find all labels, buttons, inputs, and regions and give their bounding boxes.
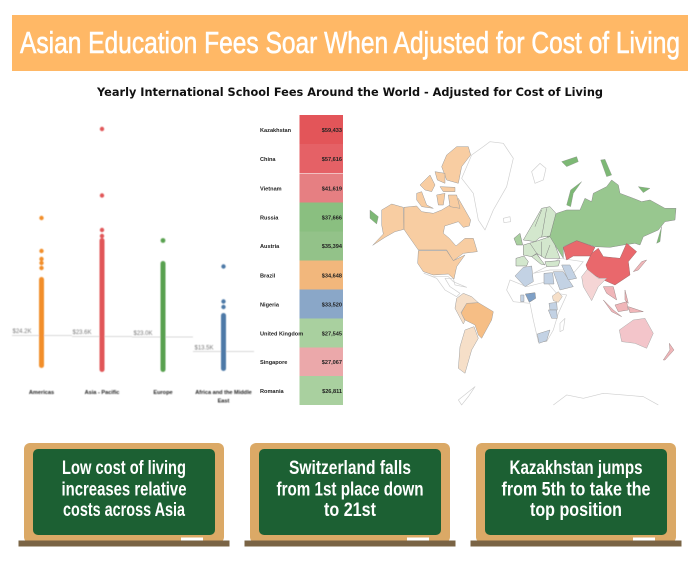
region axis labels: Africa and the Middle [195, 390, 252, 396]
table: top ten countries by fee: $34,648 [322, 274, 342, 280]
chalkboard: low cost of living: Low cost of living [62, 458, 186, 479]
region axis labels: Asia - Pacific [85, 390, 119, 396]
chalkboard: low cost of living: costs across Asia [63, 500, 185, 521]
map: unshaded outlines [424, 142, 658, 405]
chalkboard: Switzerland falls: to 21st [324, 500, 377, 521]
chalkboard: Kazakhstan jumps: Kazakhstan jumps [510, 458, 642, 479]
map: Ethiopia [552, 292, 562, 302]
map: United Kingdom [514, 233, 523, 245]
reference value labels: $23.0K [134, 331, 153, 337]
chart: fee distribution strip plot by region [12, 127, 254, 405]
table: top ten countries by fee: $37,666 [322, 216, 342, 222]
table: top ten countries by fee: $57,616 [322, 157, 342, 163]
table: top ten countries by fee: $27,545 [322, 332, 342, 338]
region axis labels: East [218, 398, 230, 404]
table: top ten countries by fee: $41,619 [322, 186, 342, 192]
table: top ten countries by fee: $33,520 [322, 302, 342, 308]
table: top ten countries by fee: $26,811 [322, 389, 342, 395]
subtitle: Yearly International School Fees Around the World - Adjusted for Cost of Living [96, 85, 603, 99]
table: top ten countries by fee: $59,433 [322, 128, 342, 134]
chalkboard: Switzerland falls: Switzerland falls [289, 458, 411, 479]
map: Nigeria [525, 293, 536, 302]
world map [370, 142, 676, 405]
map: India [582, 269, 607, 301]
map: Arctic green islands [370, 157, 662, 243]
region axis labels [29, 390, 252, 404]
title banner [12, 15, 688, 71]
reference value labels: $24.2K [12, 329, 32, 335]
chalkboard: Kazakhstan jumps: from 5th to take the [502, 480, 650, 500]
chalkboard: Kazakhstan jumps [470, 443, 682, 546]
map: Kazakhstan and China [563, 241, 637, 285]
strip: Asia-Pacific [100, 127, 104, 372]
reference value labels [12, 329, 214, 352]
table: top ten countries by fee: $35,394 [322, 244, 343, 250]
map: India and Southeast Asia [603, 260, 674, 360]
map: other South America [455, 293, 478, 373]
region axis labels: Europe [153, 390, 173, 396]
reference value labels: $13.5K [194, 346, 214, 352]
table: top ten countries by fee: Vietnam [260, 186, 282, 192]
table: top ten countries by fee [260, 115, 343, 405]
map: Africa and Middle East countries [515, 265, 577, 343]
chalkboard: Switzerland falls [244, 443, 456, 546]
table: top ten countries by fee: China [260, 157, 276, 163]
table: top ten countries by fee: Russia [260, 216, 279, 222]
strip: Africa and the Middle East [221, 264, 226, 371]
table: top ten countries by fee: Singapore [260, 360, 287, 366]
table: top ten countries by fee: Brazil [260, 274, 276, 280]
chalkboard: Kazakhstan jumps: top position [530, 500, 622, 521]
chalkboard: low cost of living: increases relative [62, 480, 186, 500]
table: top ten countries by fee: Austria [260, 244, 280, 250]
map: Brazil [461, 303, 493, 338]
table: top ten countries by fee: Nigeria [260, 302, 280, 308]
map: Europe [516, 207, 560, 267]
region axis labels: Americas [29, 390, 54, 396]
map: Australia [619, 318, 653, 348]
table: top ten countries by fee: United Kingdom [260, 332, 303, 338]
reference value labels: $23.6K [72, 330, 92, 336]
table: top ten countries by fee: Kazakhstan [260, 128, 292, 134]
chalkboard: Switzerland falls: from 1st place down [276, 480, 424, 500]
map: Alaska, Canada and USA [373, 147, 477, 279]
strip: Europe [160, 238, 166, 372]
table: top ten countries by fee: Romania [260, 389, 285, 395]
chalkboard: low cost of living [18, 443, 230, 546]
strip: Americas [39, 216, 44, 368]
table: top ten countries by fee: $27,067 [322, 360, 342, 366]
map: Russia [547, 180, 676, 258]
